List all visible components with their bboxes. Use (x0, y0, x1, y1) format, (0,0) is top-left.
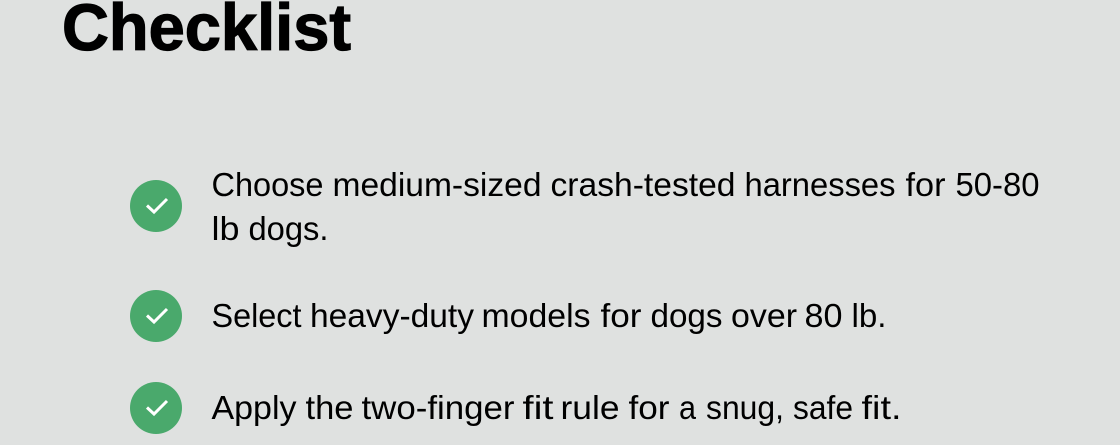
item 1 text (212, 166, 1040, 247)
item 1 text: medium-sized (332, 166, 542, 203)
item 3 text: safe (793, 389, 853, 426)
item 1 text: harnesses (744, 166, 896, 203)
item 2 text (212, 297, 886, 334)
icon: green check circle 2 (130, 290, 182, 342)
item 1 text: crash-tested (550, 166, 736, 203)
item 2 text: models (482, 297, 590, 334)
item 3 text: fit (522, 389, 554, 426)
item 1 text: lb (212, 210, 240, 247)
item 3 text: two-finger (362, 389, 515, 426)
item 1 text: for (906, 166, 946, 203)
item 2 text: heavy-duty (310, 297, 474, 334)
item 2 text: 80 (804, 297, 842, 334)
item 2 text: dogs (650, 297, 722, 334)
item 3 text: Apply (212, 389, 297, 426)
item 1 text: Choose (212, 166, 324, 203)
item 2 text: Select (212, 297, 302, 334)
item 1 text: 50-80 (956, 166, 1040, 203)
item 2 text: over (731, 297, 797, 334)
icon: green check circle 3 (130, 382, 182, 434)
item 3 text: for (628, 389, 670, 426)
item 1: harness size for 50-80 lb dogs (130, 166, 1040, 247)
item 3 text: rule (560, 389, 620, 426)
checklist items (130, 166, 1040, 434)
item 2 text: for (600, 297, 642, 334)
icon: green check circle 1 (130, 180, 182, 232)
item 2: heavy-duty models (130, 290, 886, 342)
item 3: two-finger fit rule (130, 382, 902, 434)
item 2 text: lb. (852, 297, 886, 334)
item 3 text: fit. (862, 389, 902, 426)
item 3 text: snug, (706, 389, 784, 426)
item 3 text: a (679, 389, 697, 426)
item 3 text (212, 389, 902, 426)
item 3 text: the (306, 389, 354, 426)
item 1 text: dogs. (248, 210, 328, 247)
